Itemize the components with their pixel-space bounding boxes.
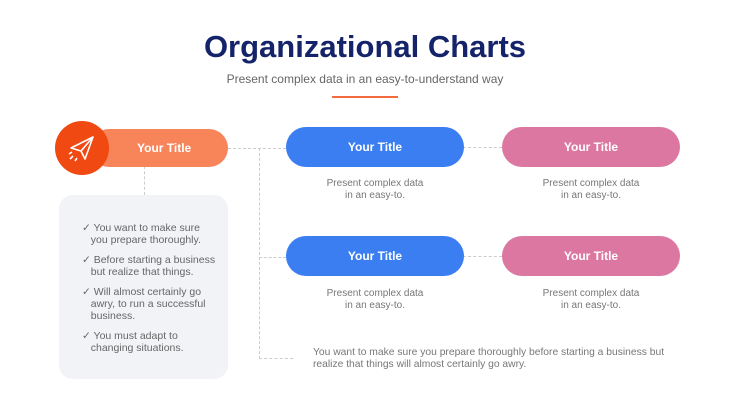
panel: checklist: you prepare thoroughly.: [91, 234, 201, 246]
desc 1: in an easy-to.: [345, 190, 405, 201]
pink pill 2: [502, 236, 680, 276]
subtitle: Present complex data in an easy-to-understand way: [227, 72, 503, 86]
blue pill 1: Your Title: [348, 140, 402, 154]
title: Organizational Charts: [204, 29, 526, 64]
desc 4: [543, 288, 640, 311]
desc 3: in an easy-to.: [345, 300, 405, 311]
desc 4: in an easy-to.: [561, 300, 621, 311]
blue pill 2: Your Title: [348, 249, 402, 263]
accent line: [332, 96, 398, 98]
panel: checklist: changing situations.: [91, 342, 184, 354]
desc 1: Present complex data: [327, 178, 423, 189]
blue pill 1: [286, 127, 464, 167]
panel: checklist: awry, to run a successful: [91, 298, 206, 310]
panel: checklist: ✓ You want to make sure: [82, 222, 200, 234]
panel: checklist: business.: [91, 310, 135, 322]
blue pill 2: [286, 236, 464, 276]
desc 3: Present complex data: [327, 288, 423, 299]
desc 3: [327, 288, 424, 311]
panel: checklist: ✓ Will almost certainly go: [82, 286, 201, 298]
panel: checklist: but realize that things.: [91, 266, 193, 278]
desc 2: Present complex data: [543, 178, 639, 189]
icon: paper plane: [55, 121, 109, 175]
desc 1: [327, 178, 424, 201]
bottom note: [313, 347, 664, 370]
main pill: [90, 129, 228, 167]
bottom note: You want to make sure you prepare thoroughly before starting a business but: [313, 347, 664, 358]
bottom note: realize that things will almost certainly go awry.: [313, 359, 526, 370]
panel: checklist: [59, 195, 228, 379]
pink pill 2: Your Title: [564, 249, 618, 263]
pink pill 1: [502, 127, 680, 167]
pink pill 1: Your Title: [564, 140, 618, 154]
desc 2: in an easy-to.: [561, 190, 621, 201]
panel: checklist: ✓ Before starting a business: [82, 254, 215, 266]
main pill: Your Title: [137, 141, 191, 155]
desc 2: [543, 178, 640, 201]
panel: checklist: ✓ You must adapt to: [82, 330, 178, 342]
desc 4: Present complex data: [543, 288, 639, 299]
